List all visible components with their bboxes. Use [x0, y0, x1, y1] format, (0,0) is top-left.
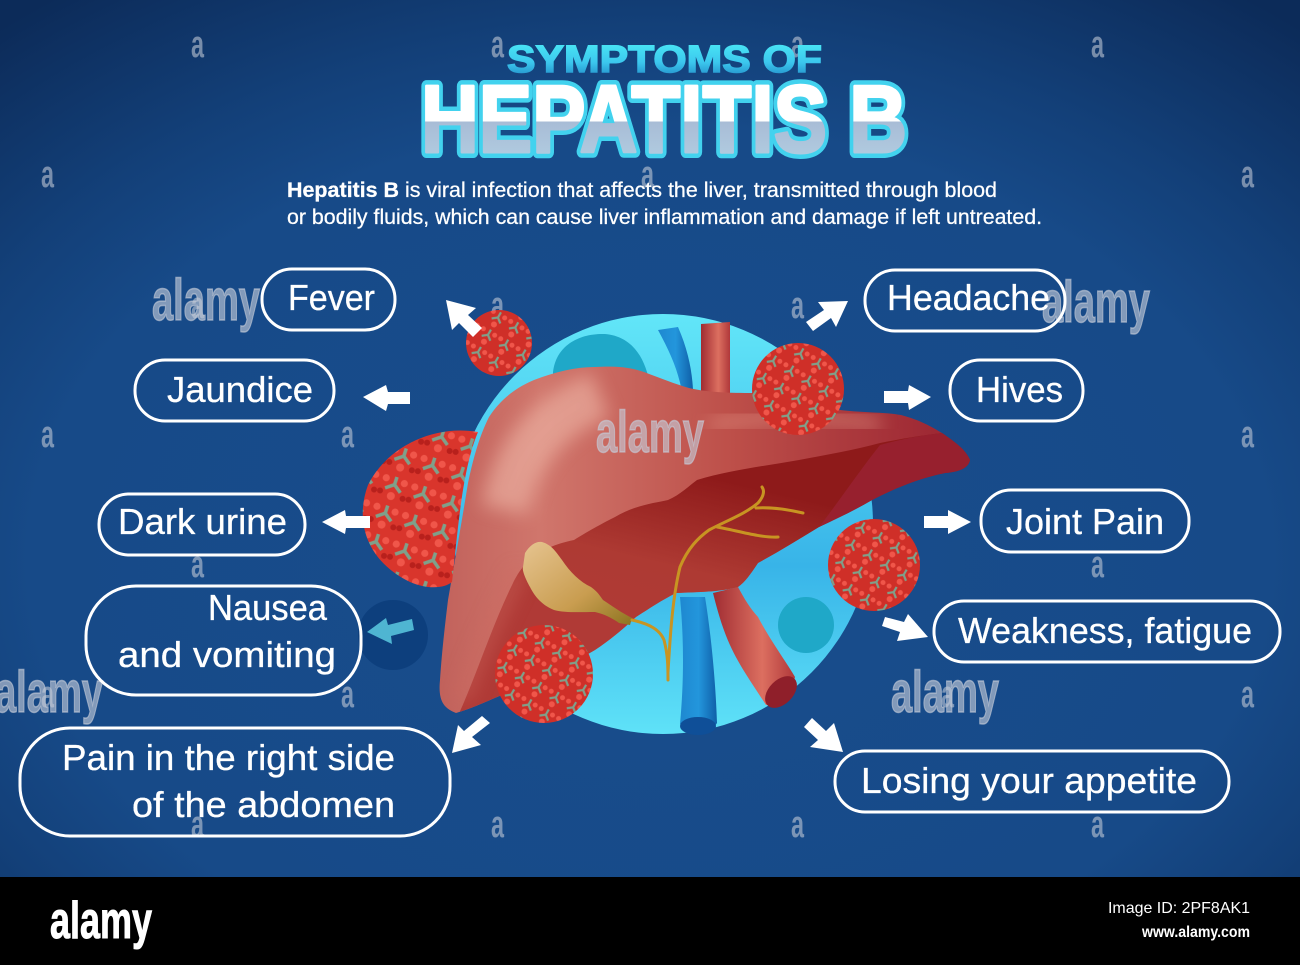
description	[287, 179, 1042, 229]
watermark: small repeated marks: a	[341, 414, 355, 456]
label: losing your appetite: Losing your appetite	[861, 760, 1197, 801]
virus particles	[363, 310, 920, 723]
arrow: fever	[446, 300, 482, 337]
watermark: small repeated marks: a	[41, 414, 55, 456]
label: weakness, fatigue	[934, 601, 1280, 662]
label: pain in the right side of the abdomen: Pain in the right side	[62, 737, 395, 778]
label: hives: Hives	[976, 369, 1063, 410]
label: pain in the right side of the abdomen	[20, 728, 450, 836]
watermark: small repeated marks: a	[791, 544, 805, 586]
watermark: small repeated marks: a	[641, 154, 655, 196]
disc spots	[553, 334, 834, 653]
blood vessels	[658, 322, 803, 735]
watermark: small repeated marks	[41, 24, 1255, 846]
watermark: small repeated marks: a	[191, 285, 205, 327]
arrow: headache	[806, 301, 848, 331]
label: fever: Fever	[288, 277, 375, 318]
watermark: large logos: alamy	[596, 400, 704, 465]
arrow: jaundice	[363, 385, 410, 411]
watermark: small repeated marks: a	[491, 285, 505, 327]
watermark: small repeated marks: a	[491, 24, 505, 66]
watermark: small repeated marks: a	[41, 674, 55, 716]
title: hepatitis b: HEPATITIS B	[421, 66, 907, 173]
label: dark urine: Dark urine	[118, 501, 287, 542]
label: losing your appetite	[835, 751, 1229, 812]
watermark: small repeated marks: a	[191, 544, 205, 586]
watermark: small repeated marks: a	[191, 24, 205, 66]
watermark: small repeated marks: a	[791, 285, 805, 327]
label: weakness, fatigue: Weakness, fatigue	[958, 610, 1252, 651]
watermark: small repeated marks: a	[1091, 24, 1105, 66]
watermark: small repeated marks: a	[641, 674, 655, 716]
arrow: joint pain	[924, 510, 971, 534]
watermark: small repeated marks: a	[341, 674, 355, 716]
watermark: small repeated marks: a	[791, 804, 805, 846]
label: nausea and vomiting: Nausea	[208, 587, 328, 628]
label: joint pain	[981, 490, 1189, 552]
label: jaundice	[135, 360, 334, 421]
footer band: alamy	[50, 892, 152, 950]
label: fever	[262, 269, 395, 330]
arrow: appetite	[804, 718, 843, 752]
arrow: dark urine	[322, 510, 370, 534]
watermark: small repeated marks: a	[41, 154, 55, 196]
arrows	[322, 300, 971, 753]
watermark: small repeated marks: a	[491, 544, 505, 586]
watermark: small repeated marks: a	[1241, 414, 1255, 456]
central illustration: liver, vessels, viruses	[363, 310, 990, 735]
watermark: small repeated marks: a	[791, 24, 805, 66]
label: headache: Headache	[887, 277, 1050, 318]
arrow: weakness	[882, 614, 928, 641]
title: symptoms of: SYMPTOMS OF	[507, 39, 822, 81]
footer band: www.alamy.com	[1141, 924, 1250, 941]
description: or bodily fluids, which can cause liver inflammation and damage if left untreated.	[287, 206, 1042, 229]
watermark: large logos: alamy	[891, 660, 999, 725]
label: hives	[950, 360, 1083, 421]
watermark: small repeated marks: a	[1241, 674, 1255, 716]
backdrop disc	[453, 314, 873, 734]
label: nausea and vomiting: and vomiting	[118, 634, 336, 675]
label: nausea and vomiting	[86, 586, 361, 695]
label: headache	[865, 270, 1065, 331]
watermark: small repeated marks: a	[1091, 804, 1105, 846]
description: Hepatitis B is viral infection that affects the liver, transmitted through blood	[287, 179, 997, 202]
footer band: Image ID: 2PF8AK1	[1108, 900, 1250, 917]
gallbladder and ducts	[523, 487, 803, 680]
watermark: large logos	[0, 268, 1150, 725]
arrow: hives	[884, 385, 931, 410]
label: joint pain: Joint Pain	[1006, 501, 1164, 542]
watermark: small repeated marks: a	[1241, 154, 1255, 196]
watermark: large logos: alamy	[1042, 270, 1150, 335]
watermark: small repeated marks: a	[191, 804, 205, 846]
liver	[430, 360, 990, 720]
label: jaundice: Jaundice	[167, 369, 313, 410]
footer band	[0, 877, 1300, 965]
arrow: pain	[452, 716, 490, 753]
watermark: small repeated marks: a	[941, 674, 955, 716]
title: hepatitis b: HEPATITIS B	[421, 66, 907, 173]
label: dark urine	[99, 494, 305, 555]
watermark: small repeated marks: a	[491, 804, 505, 846]
watermark: large logos: alamy	[152, 268, 260, 333]
nausea marker: dark circle with teal arrow	[358, 600, 428, 670]
watermark: small repeated marks: a	[1091, 544, 1105, 586]
label: pain in the right side of the abdomen: of the abdomen	[132, 784, 395, 825]
